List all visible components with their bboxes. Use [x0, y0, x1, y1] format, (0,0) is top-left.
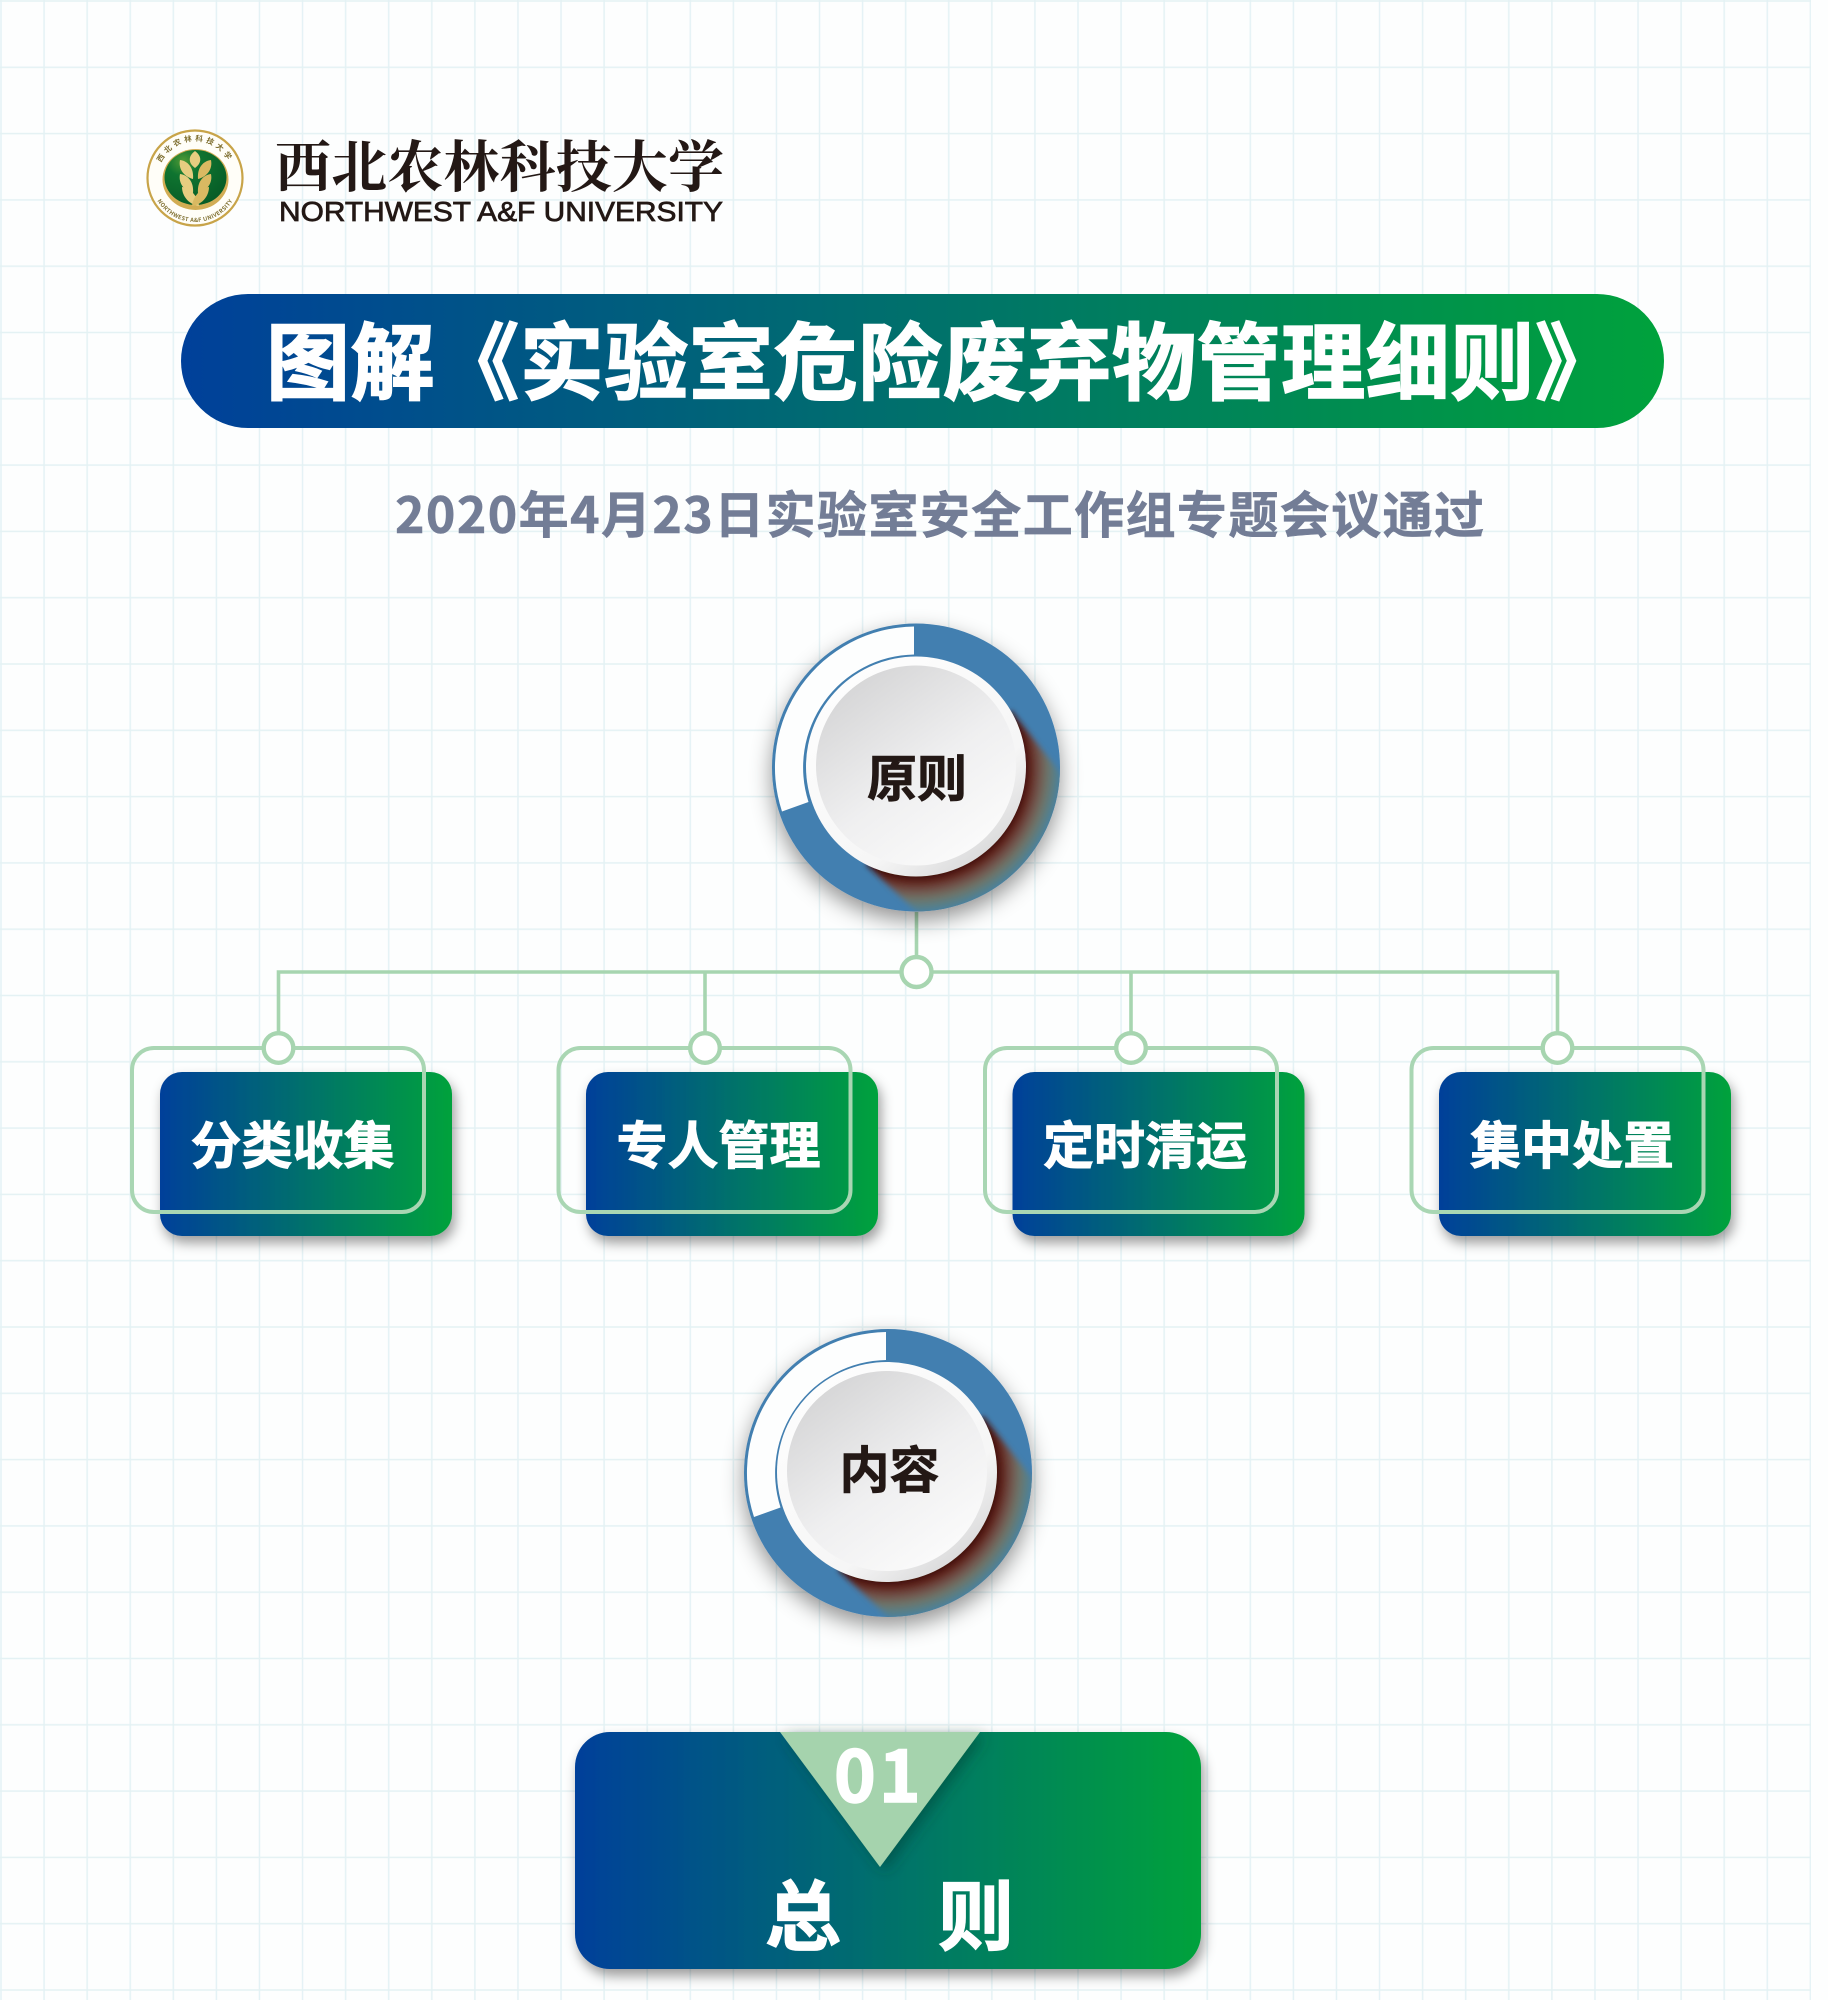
label: 原则	[867, 740, 967, 812]
section title: 总	[765, 1856, 841, 1966]
card: 集中处置	[1412, 1033, 1731, 1236]
white progress arc	[747, 1332, 886, 1517]
icon: university seal	[146, 129, 244, 227]
card: 专人管理	[558, 1033, 878, 1236]
node	[1543, 1033, 1572, 1063]
card label: 定时清运	[1043, 1105, 1247, 1179]
university name (Chinese): 西北农林科技大学	[275, 124, 724, 204]
node	[264, 1033, 293, 1063]
node	[690, 1033, 720, 1063]
white progress arc	[775, 626, 914, 812]
university name (English): NORTHWEST A&F UNIVERSITY	[279, 196, 723, 227]
university logo	[146, 124, 724, 227]
outline frame	[132, 1048, 424, 1212]
connector lines: principle tree	[278, 912, 1558, 1048]
section title: 则	[938, 1856, 1014, 1966]
node	[1116, 1033, 1146, 1063]
outline frame	[1412, 1048, 1704, 1212]
card label: 集中处置	[1470, 1105, 1674, 1179]
card label: 分类收集	[190, 1105, 395, 1179]
icon: university seal: NORTHWEST A&F UNIVERSITY	[158, 198, 232, 222]
title banner	[181, 294, 1664, 428]
card: 定时清运	[985, 1033, 1304, 1236]
section header: 01 总则	[575, 1721, 1201, 1969]
outline frame	[985, 1048, 1277, 1212]
card label: 专人管理	[616, 1105, 821, 1179]
triangle tab	[780, 1732, 980, 1867]
outline frame	[558, 1048, 850, 1212]
card: 分类收集	[132, 1033, 452, 1236]
title: 图解《实验室危险废弃物管理细则》	[266, 297, 1620, 418]
subtitle: 2020年4月23日实验室安全工作组专题会议通过	[395, 476, 1484, 548]
section number: 01	[834, 1721, 924, 1823]
circle badge: content	[744, 1329, 1038, 1673]
icon: university seal: 西北农林科技大学	[156, 134, 232, 162]
circle badge: principle	[772, 624, 1066, 968]
label: 内容	[840, 1431, 940, 1503]
